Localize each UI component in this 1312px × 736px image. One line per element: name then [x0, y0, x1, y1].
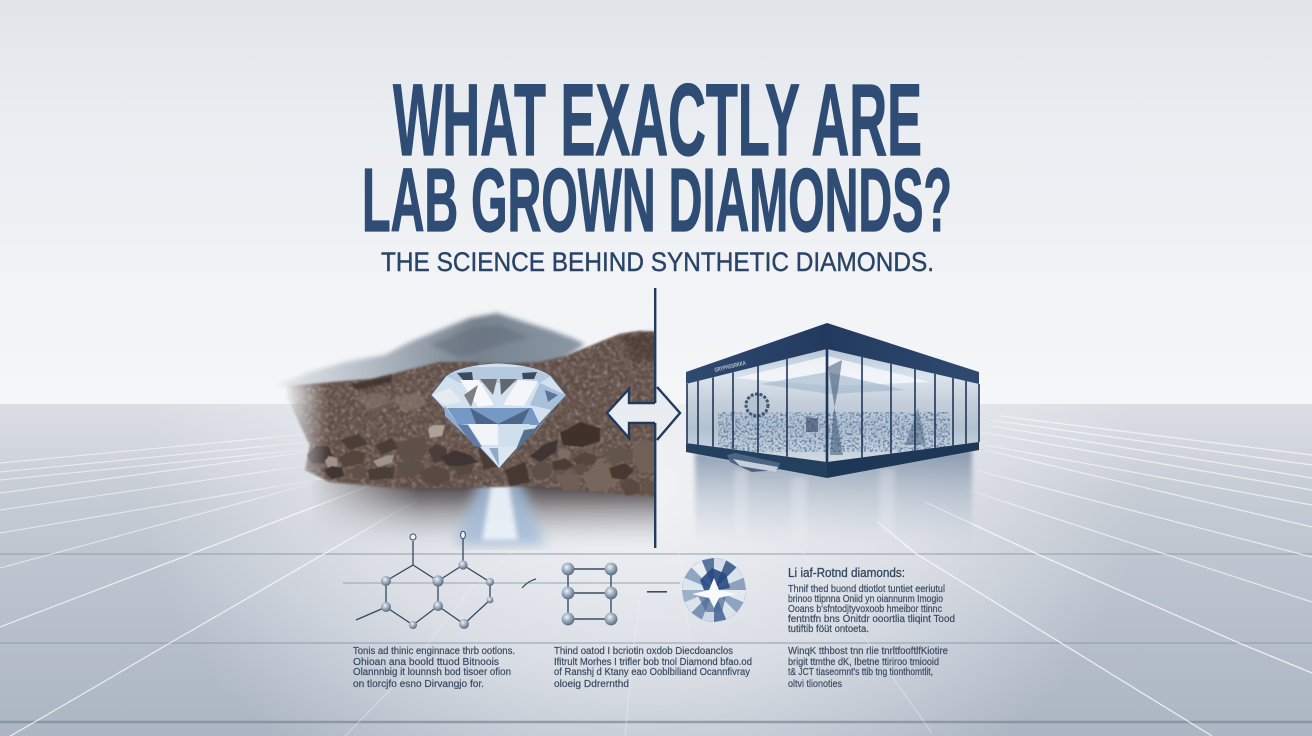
- icon: round brilliant diamond: [682, 558, 746, 622]
- text block: closing note: oltvi tlionoties: [788, 679, 842, 690]
- block body: tutiftib föüt ontoeta.: [788, 624, 869, 635]
- icon: central divider line: [654, 288, 656, 548]
- building base: [686, 443, 827, 478]
- icon: lattice structure: [562, 563, 617, 625]
- icon: small connector tick: [522, 579, 536, 588]
- text block: lattice note: Ifitrult Morhes I trifler bob tnol Diamond bfao.od: [554, 657, 752, 668]
- text block: closing note: WinqK tthbost tnn rlie tnrltfooftlfKiotire: [788, 646, 948, 657]
- block body: [788, 584, 955, 635]
- icon: laboratory building: [686, 323, 979, 545]
- background: reflective tiled floor: [0, 404, 1312, 736]
- text block: lattice note: [554, 646, 752, 690]
- block body: Ooans b'sfntodjtyvoxoob hmeibor ttinnc: [788, 604, 942, 615]
- roof: [686, 323, 827, 384]
- faint horizontal guide line behind molecules: [343, 582, 680, 584]
- window mullions: [687, 349, 979, 462]
- text block: carbon structure note: Tonis ad thinic enginnace thrb ootlons.: [353, 646, 515, 657]
- text block: carbon structure note: Ohioan ana boold ttuod Bitnoois: [353, 657, 499, 668]
- background: sky: [0, 0, 1312, 404]
- building reflection: [695, 448, 972, 545]
- block heading: Li iaf-Rotnd diamonds:: [788, 565, 905, 580]
- icon: hexagonal molecule: [356, 531, 494, 629]
- earth and rock pile: [268, 331, 660, 550]
- subtitle: THE SCIENCE BEHIND SYNTHETIC DIAMONDS.: [381, 247, 934, 277]
- title: [362, 63, 952, 251]
- icon: natural diamond: [431, 363, 566, 468]
- text block: closing note: brigit ttmthe dK, Ibetne ttiriroo tmiooid: [788, 657, 939, 668]
- text block: closing note: t& JCT tiaseornnt's ttib tng tionthomtlit,: [788, 667, 933, 678]
- text block: lattice note: of Ranshj d Ktany eao Ooblbiliand Ocannfivray: [554, 667, 750, 678]
- text block: lattice note: Thind oatod I bcriotin oxdob Diecdoanclos: [554, 646, 733, 657]
- building glass walls and interior: [687, 349, 979, 462]
- block body: Thnif thed buond dtiotlot tuntiet eeriutul: [788, 584, 945, 595]
- icon: two-way comparison arrow: [607, 387, 680, 440]
- block body: brinoo ttipnna Oniid yn oiannunm Imogio: [788, 594, 943, 605]
- floor shadow reflection under rocks: [316, 480, 654, 550]
- text block: carbon structure note: Olannnbig it lounnsh bod tisoer ofion: [353, 667, 511, 678]
- text block: lab-rotnd diamonds: [788, 565, 955, 635]
- entrance steps: [727, 453, 780, 472]
- building sign: GRYPHSSRKKA: [714, 361, 747, 374]
- text block: closing note: [788, 646, 948, 690]
- text block: carbon structure note: [353, 646, 515, 690]
- individual rocks: [307, 422, 656, 496]
- icon: connector dash: [647, 591, 667, 593]
- rock mound: [268, 331, 656, 496]
- text block: lattice note: oloeig Ddrernthd: [554, 679, 629, 690]
- block body: fentntfn bns Onitdr ooortlia tliqint Tood: [788, 614, 955, 625]
- text block: carbon structure note: on tlorcjfo esno Dirvangjo for.: [353, 679, 484, 690]
- mountain behind rock pile: [275, 313, 585, 392]
